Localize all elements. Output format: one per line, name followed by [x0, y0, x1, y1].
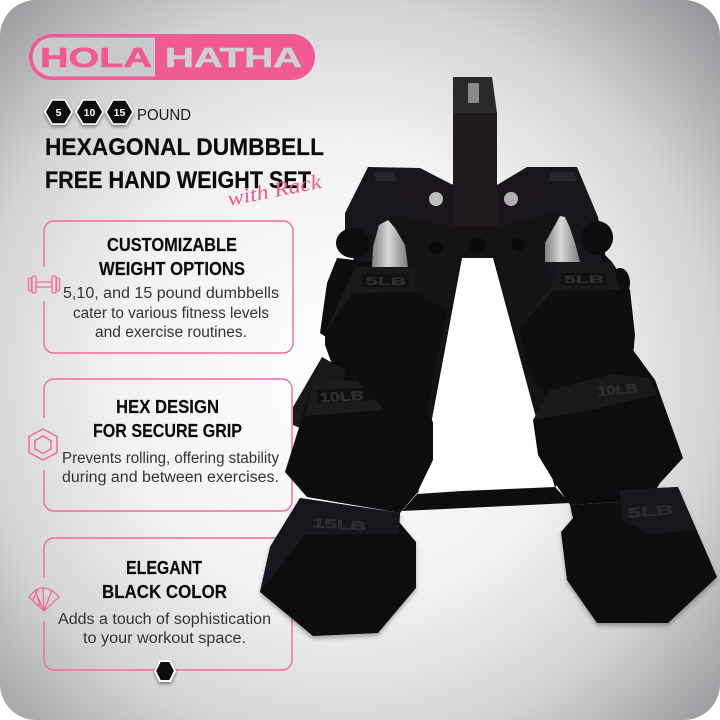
left 10 lb rear dumbbell [293, 357, 345, 428]
body text: Prevents rolling, offering stability [62, 450, 279, 467]
left 10 lb dumbbell [285, 380, 433, 513]
white gap inside rack [418, 258, 556, 494]
badge: 15 [106, 100, 133, 124]
badge: 5 [45, 100, 72, 124]
panel: hex design [29, 379, 292, 511]
icon: colour swatch fan [29, 588, 59, 611]
photo: dumbbell rack [260, 77, 717, 636]
body text: and exercise routines. [95, 324, 247, 341]
body text [62, 450, 279, 486]
rack front legs [370, 212, 600, 494]
right lower dumbbell [561, 487, 717, 623]
panel: elegant black color [29, 538, 292, 681]
POUND label: POUND [137, 107, 191, 124]
badge: 10: 10 [84, 107, 95, 119]
heading: BLACK COLOR [102, 581, 227, 602]
rack back brackets [397, 169, 550, 230]
rear dumbbell end caps [320, 217, 635, 350]
heading: WEIGHT OPTIONS [99, 258, 245, 279]
logo: Hola Hatha: HATHA [165, 42, 302, 73]
main heading: HEXAGONAL DUMBBELL [45, 134, 324, 161]
body text [63, 285, 279, 341]
left 5 lb dumbbell [325, 267, 447, 440]
left 15 lb dumbbell [260, 498, 416, 636]
right 10 lb dumbbell: 10LB [597, 381, 638, 399]
badge: 5: 5 [56, 107, 62, 119]
heading: CUSTOMIZABLE [107, 234, 237, 255]
right lower dumbbell: 5LB [627, 501, 674, 521]
heading [99, 234, 245, 279]
body text: Adds a touch of sophistication [58, 611, 271, 628]
rack hardware [430, 237, 524, 254]
right 5 lb dumbbell: 5LB [564, 274, 604, 286]
panel: customizable weight options [28, 221, 293, 353]
silver dumbbell handles [372, 216, 580, 267]
icon: hexagon [29, 429, 57, 460]
body text: to your workout space. [83, 630, 246, 647]
icon: dumbbell [28, 276, 60, 293]
rear top dumbbells [345, 167, 612, 300]
badge: 10 [76, 100, 103, 124]
heading [102, 557, 227, 602]
heading: FOR SECURE GRIP [93, 420, 242, 441]
main heading [45, 134, 324, 194]
rack upright [453, 77, 497, 258]
left 10 lb dumbbell: 10LB [319, 388, 364, 405]
left 5 lb dumbbell: 5LB [366, 276, 406, 288]
weight badges and POUND label [45, 100, 191, 124]
body text: 5,10, and 15 pound dumbbells [63, 285, 279, 302]
badge: 15: 15 [114, 107, 125, 119]
body text: during and between exercises. [62, 469, 279, 486]
main heading: FREE HAND WEIGHT SET [45, 167, 311, 194]
body text: cater to various fitness levels [73, 305, 269, 322]
script: with Rack: with Rack [225, 169, 324, 211]
right 10 lb dumbbell [533, 350, 683, 505]
heading: ELEGANT [126, 557, 203, 578]
logo: Hola Hatha [29, 34, 315, 80]
logo: Hola Hatha: HOLA [40, 42, 152, 73]
heading: HEX DESIGN [116, 396, 219, 417]
rack floor crossbar [402, 487, 570, 511]
right 5 lb dumbbell [520, 262, 635, 420]
left 15 lb dumbbell: 15LB [312, 515, 367, 534]
icon: bottom hexagon marker [155, 661, 175, 681]
bracket holes [429, 192, 518, 206]
heading [93, 396, 242, 441]
body text [58, 611, 271, 647]
